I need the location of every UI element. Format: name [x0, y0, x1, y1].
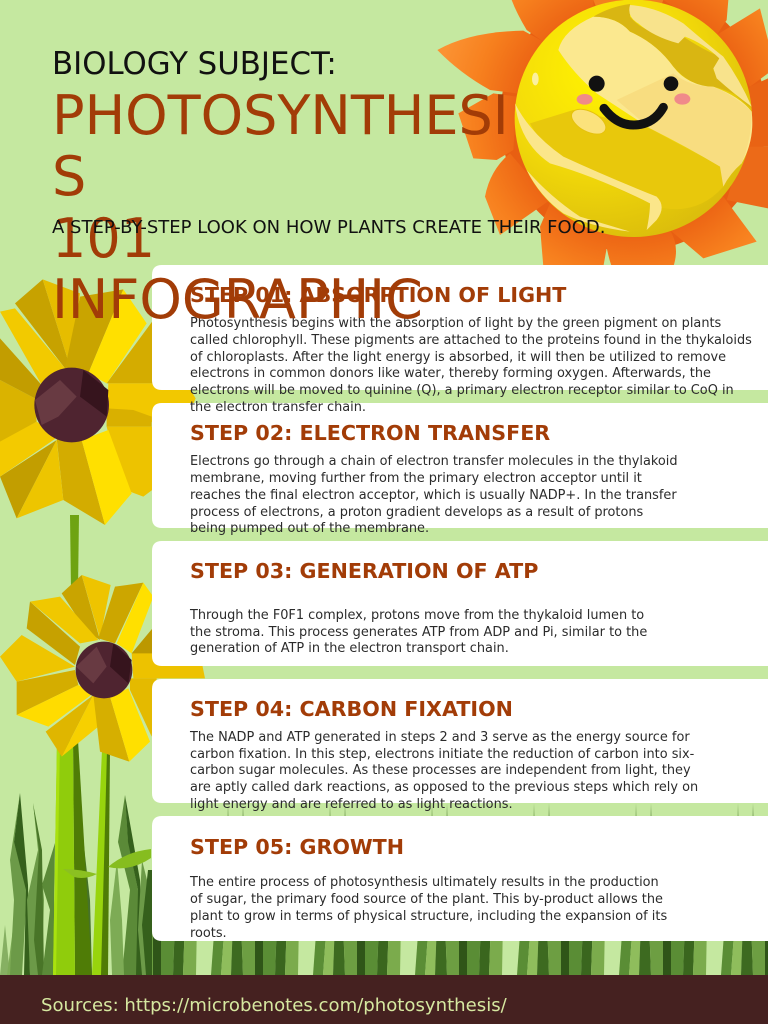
icon: smiling sun [437, 0, 768, 267]
text block: the stroma. This process generates ATP from ADP and Pi, similar to the [190, 625, 647, 640]
illustration: lower flower [0, 575, 205, 762]
text block: roots. [190, 926, 227, 941]
illustration: grass [0, 790, 768, 975]
text block: the electron transfer chain. [190, 400, 366, 415]
text block: membrane, moving further from the primary electron acceptor until it [190, 471, 642, 486]
heading: STEP 02: ELECTRON TRANSFER [190, 421, 550, 445]
flower center [76, 642, 132, 698]
text block: electrons in common donors like water, thereby forming oxygen. Afterwards, the [190, 366, 711, 381]
text block: Electrons go through a chain of electron transfer molecules in the thylakoid [190, 454, 678, 469]
text block: of chloroplasts. After the light energy is absorbed, it will then be utilized to remove [190, 350, 726, 365]
sun cheeks [577, 93, 690, 105]
text block: generation of ATP in the electron transport chain. [190, 641, 509, 656]
heading: STEP 04: CARBON FIXATION [190, 697, 513, 721]
sun eyes [589, 76, 678, 92]
text block: being pumped out of the membrane. [190, 521, 429, 536]
title overflow line: INFOGRAPHIC [52, 268, 423, 331]
text block: carbon fixation. In this step, electrons initiate the reduction of carbon into six- [190, 747, 695, 762]
text block: light energy and are referred to as light reactions. [190, 797, 513, 812]
sun smile [604, 107, 663, 125]
illustration: upper flower [0, 279, 196, 525]
main title: PHOTOSYNTHESI [52, 84, 509, 147]
illustration: thin stem [92, 750, 110, 975]
heading: STEP 03: GENERATION OF ATP [190, 559, 538, 583]
main title: 101 [52, 207, 155, 270]
panel: step 5 [152, 816, 768, 941]
text block: are aptly called dark reactions, as opposed to the previous steps which rely on [190, 780, 698, 795]
heading: STEP 01: ABSORPTION OF LIGHT [190, 283, 566, 307]
text block [189, 730, 698, 812]
panel: step 1 [152, 265, 768, 415]
heading: STEP 05: GROWTH [190, 835, 404, 859]
text block: called chlorophyll. These pigments are attached to the proteins found in the thykaloids [190, 333, 752, 348]
flower center [34, 368, 109, 442]
text block: electrons will be moved to quinine (Q), a primary electron receptor similar to CoQ in [190, 383, 734, 398]
tagline: A STEP-BY-STEP LOOK ON HOW PLANTS CREATE THEIR FOOD. [52, 217, 605, 238]
text block [190, 316, 752, 415]
text block [190, 454, 678, 536]
panel: step 3 [152, 541, 768, 666]
text block: plant to grow in terms of physical structure, including the expansion of its [190, 909, 667, 924]
title block [52, 46, 605, 270]
text block: The NADP and ATP generated in steps 2 and 3 serve as the energy source for [189, 730, 690, 745]
illustration: upper stem [70, 515, 79, 590]
text block: Through the F0F1 complex, protons move from the thykaloid lumen to [189, 608, 644, 623]
text block: The entire process of photosynthesis ultimately results in the production [189, 875, 659, 890]
main title [52, 84, 509, 270]
footer bar [0, 975, 768, 1024]
text block [189, 875, 667, 941]
subject line: BIOLOGY SUBJECT: [52, 46, 337, 82]
text block: of sugar, the primary food source of the plant. This by-product allows the [190, 892, 663, 907]
panel: step 2 [152, 403, 768, 536]
text block: process of electrons, a proton gradient develops as a result of protons [190, 505, 644, 520]
left blades [0, 793, 152, 975]
text block: carbon sugar molecules. As these processes are independent from light, they [190, 763, 691, 778]
text block: Photosynthesis begins with the absorption of light by the green pigment on plants [190, 316, 722, 331]
main title: S [52, 145, 86, 208]
text block [189, 608, 647, 656]
illustration: main stem [53, 740, 92, 975]
panel: step 4 [152, 679, 768, 812]
sources: Sources: https://microbenotes.com/photosynthesis/ [41, 995, 508, 1016]
text block: reaches the final electron acceptor, which is usually NADP+. In the transfer [190, 488, 677, 503]
illustration: leaves [63, 849, 151, 878]
